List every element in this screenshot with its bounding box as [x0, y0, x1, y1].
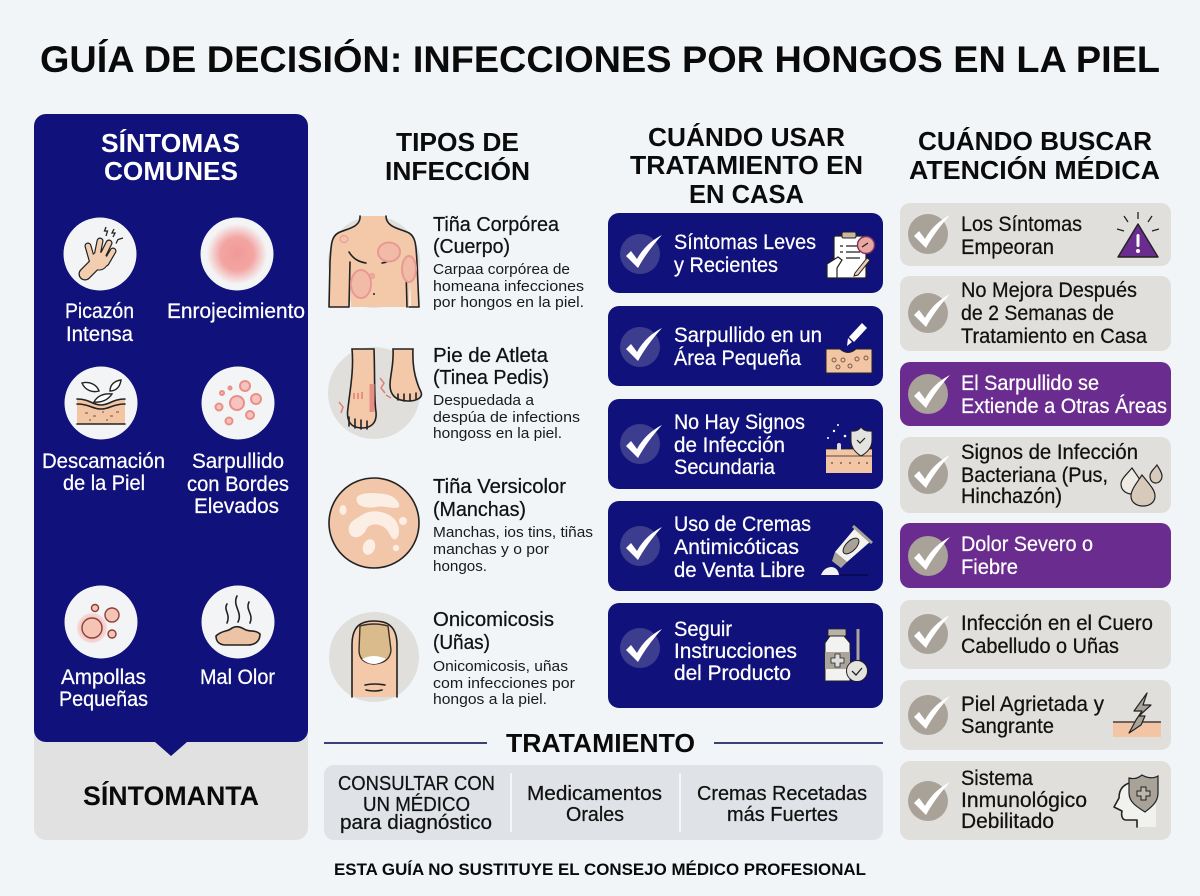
text: onicomicosis	[433, 609, 575, 708]
card: seguir instrucciones: Seguir	[674, 618, 732, 641]
label: sarpullido con bordes elevados: Elevados	[194, 495, 279, 518]
text: tiña versicolor: manchas y o por	[433, 542, 549, 558]
card: no mejora después de 2 semanas	[900, 276, 1171, 351]
text: onicomicosis: hongos a la piel.	[433, 692, 547, 708]
card: síntomas leves: y Recientes	[674, 254, 778, 277]
card: dolor severo o fiebre: Dolor Severo o	[961, 533, 1093, 556]
text: pie de atleta: hongoss en la piel.	[433, 426, 562, 442]
icon: picazón hand	[64, 218, 136, 290]
card: signos de infección bacteriana: Bacteriana (Pus,	[961, 464, 1108, 487]
card: el sarpullido se extiende	[900, 362, 1171, 426]
heading: cuándo buscar atención médica: ATENCIÓN MÉDICA	[909, 155, 1160, 185]
icon: piel agrietada	[1113, 693, 1161, 737]
option: consultar con un médico: CONSULTAR CON	[338, 773, 495, 795]
card: sarpullido en un área pequeña	[608, 306, 883, 386]
option: consultar con un médico	[338, 773, 495, 834]
column: cuándo buscar atención médica	[900, 126, 1171, 840]
heading: cuándo usar tratamiento en casa: EN CASA	[689, 179, 804, 209]
label: sarpullido con bordes elevados: con Bordes	[187, 473, 289, 496]
card: los síntomas empeoran: Empeoran	[961, 236, 1054, 259]
label: picazón intensa: Intensa	[66, 323, 133, 346]
card: dolor severo o fiebre: Fiebre	[961, 556, 1018, 579]
section: tratamiento	[324, 728, 883, 840]
card: no mejora después de 2 semanas: de 2 Semanas de	[961, 302, 1114, 325]
label: sarpullido con bordes elevados	[187, 450, 289, 518]
card: sistema inmunológico debilitado: Inmunológico	[961, 789, 1087, 812]
card: sin signos de infección secundaria: de Infección	[674, 434, 785, 457]
icon: escudo y piel	[826, 424, 872, 473]
icon: gotas de pus	[1121, 465, 1162, 506]
label: picazón intensa: Picazón	[65, 300, 134, 323]
column: cuándo usar tratamiento en casa	[608, 122, 883, 708]
column: tipos de infección	[328, 127, 593, 708]
option: consultar con un médico: para diagnóstico	[340, 812, 492, 834]
icon: mal olor	[202, 586, 274, 658]
text: tiña versicolor: (Manchas)	[433, 499, 526, 521]
card: el sarpullido se extiende: El Sarpullido se	[961, 372, 1099, 395]
heading: síntomas comunes: COMUNES	[104, 156, 238, 186]
card: no mejora después de 2 semanas: No Mejora Después	[961, 279, 1137, 302]
card: seguir instrucciones: del Producto	[674, 662, 791, 685]
card: sistema inmunológico debilitado: Debilitado	[961, 810, 1054, 833]
text: tiña corpórea: por hongos en la piel.	[433, 295, 584, 311]
title: GUÍA DE DECISIÓN: INFECCIONES POR HONGOS EN LA PIEL	[40, 38, 1160, 80]
option: cremas recetadas: Cremas Recetadas	[697, 783, 867, 805]
icon: ampollas	[64, 586, 138, 658]
text: tiña versicolor: hongos.	[433, 559, 487, 575]
card: piel agrietada y sangrante	[900, 680, 1171, 750]
card: el sarpullido se extiende: Extiende a Otras Áreas	[961, 395, 1167, 418]
option: medicamentos orales: Orales	[566, 804, 624, 826]
card: signos de infección bacteriana: Hinchazón)	[961, 485, 1062, 508]
icon: pies pie de atleta	[328, 347, 421, 439]
heading: cuándo buscar atención médica: CUÁNDO BUSCAR	[918, 126, 1152, 156]
label: sarpullido con bordes elevados: Sarpullido	[192, 450, 284, 473]
card: sistema inmunológico debilitado: Sistema	[961, 767, 1033, 790]
heading: cuándo usar tratamiento en casa: CUÁNDO USAR	[648, 122, 845, 152]
label: picazón intensa	[65, 300, 134, 346]
text: tiña corpórea: Tiña Corpórea	[433, 214, 560, 236]
card: no mejora después de 2 semanas: Tratamiento en Casa	[961, 325, 1147, 348]
icon: sarpullido	[202, 366, 274, 440]
heading: tipos de infección: INFECCIÓN	[385, 156, 530, 186]
card: signos de infección bacteriana	[900, 437, 1171, 513]
heading: síntomas comunes: SÍNTOMAS	[101, 128, 240, 158]
icon: crema sobre piel	[826, 323, 872, 373]
label: ampollas pequeñas	[59, 666, 148, 711]
icon: frasco de medicamento	[825, 629, 868, 682]
text: tiña corpórea	[433, 214, 584, 311]
card: dolor severo o fiebre	[900, 523, 1171, 588]
option: cremas recetadas: más Fuertes	[727, 804, 838, 826]
option: medicamentos orales: Medicamentos	[527, 783, 662, 805]
card: síntomas leves: Síntomas Leves	[674, 231, 816, 254]
card: sarpullido en un área pequeña: Área Pequeña	[674, 347, 801, 370]
text: tiña corpórea: (Cuerpo)	[433, 236, 510, 258]
icon: enrojecimiento	[200, 218, 274, 290]
card: sistema inmunológico debilitado	[900, 761, 1171, 840]
icon: advertencia	[1117, 212, 1159, 257]
text: pie de atleta: Despuedada a	[433, 393, 535, 409]
card: síntomas leves	[608, 213, 883, 293]
icon: uña onicomicosis	[329, 612, 419, 702]
card: los síntomas empeoran	[900, 203, 1171, 266]
text: tiña corpórea: homeana infecciones	[433, 279, 584, 295]
text: onicomicosis: Onicomicosis	[433, 609, 554, 631]
card: seguir instrucciones	[608, 603, 883, 708]
heading: cuándo usar tratamiento en casa: TRATAMIENTO EN	[630, 150, 863, 180]
card: signos de infección bacteriana: Signos de Infección	[961, 441, 1138, 464]
text: tiña versicolor	[433, 476, 593, 575]
text: tiña versicolor: Tiña Versicolor	[433, 476, 566, 498]
label: mal olor: Mal Olor	[200, 666, 275, 689]
icon: tubo de crema	[821, 526, 872, 575]
panel: opciones de tratamiento	[324, 765, 883, 840]
text: onicomicosis: (Uñas)	[433, 632, 490, 654]
option: cremas recetadas	[697, 783, 867, 826]
heading: tratamiento: TRATAMIENTO	[506, 728, 695, 758]
panel: síntomas comunes	[34, 114, 308, 840]
icon: portapapeles	[827, 232, 874, 278]
text: onicomicosis: Onicomicosis, uñas	[433, 659, 568, 675]
card: infección cuero cabelludo: Cabelludo o Uñas	[961, 635, 1119, 658]
label: ampollas pequeñas: Pequeñas	[59, 688, 148, 711]
icon: tiña versicolor piel con manchas	[329, 478, 419, 568]
label: descamación de la piel	[42, 450, 165, 495]
card: los síntomas empeoran: Los Síntomas	[961, 213, 1082, 236]
icon: cabeza con escudo	[1114, 775, 1158, 827]
label: descamación de la piel: Descamación	[42, 450, 165, 473]
option: medicamentos orales	[527, 783, 662, 826]
label: enrojecimiento: Enrojecimiento	[167, 300, 305, 323]
card: cremas antimicóticas	[608, 501, 883, 591]
card: cremas antimicóticas: de Venta Libre	[674, 559, 805, 582]
text: pie de atleta	[433, 345, 580, 442]
label: descamación de la piel: de la Piel	[63, 472, 145, 495]
footer disclaimer: ESTA GUÍA NO SUSTITUYE EL CONSEJO MÉDICO PROFESIONAL	[334, 860, 866, 879]
card: piel agrietada y sangrante: Piel Agrietada y	[961, 693, 1104, 716]
card: sin signos de infección secundaria: Secundaria	[674, 456, 775, 479]
icon: descamación	[64, 366, 138, 440]
card: sin signos de infección secundaria: No Hay Signos	[674, 411, 805, 434]
card: cremas antimicóticas: Uso de Cremas	[674, 513, 811, 536]
option: consultar con un médico: UN MÉDICO	[363, 793, 470, 816]
text: pie de atleta: Pie de Atleta	[433, 345, 549, 367]
card: infección cuero cabelludo	[900, 600, 1171, 669]
text: pie de atleta: despúa de infections	[433, 410, 580, 426]
text: tiña corpórea: Carpaa corpórea de	[433, 262, 570, 278]
card: cremas antimicóticas: Antimicóticas	[674, 536, 799, 559]
heading: síntomas comunes	[101, 128, 240, 186]
heading: cuándo buscar atención médica	[909, 126, 1160, 185]
heading: cuándo usar tratamiento en casa	[630, 122, 863, 209]
card: sarpullido en un área pequeña: Sarpullido en un	[674, 324, 822, 347]
card: infección cuero cabelludo: Infección en el Cuero	[961, 612, 1153, 635]
heading: tipos de infección	[385, 127, 530, 186]
card: seguir instrucciones: Instrucciones	[674, 640, 797, 663]
card: sin signos de infección secundaria	[608, 399, 883, 489]
label: síntomanta: SÍNTOMANTA	[83, 780, 259, 811]
label: ampollas pequeñas: Ampollas	[61, 666, 146, 689]
card: piel agrietada y sangrante: Sangrante	[961, 715, 1054, 738]
text: tiña versicolor: Manchas, ios tins, tiñas	[433, 525, 593, 541]
text: onicomicosis: com infecciones por	[433, 676, 575, 692]
text: pie de atleta: (Tinea Pedis)	[433, 367, 549, 389]
heading: tipos de infección: TIPOS DE	[396, 127, 519, 157]
icon: torso tiña corpórea	[328, 216, 420, 308]
